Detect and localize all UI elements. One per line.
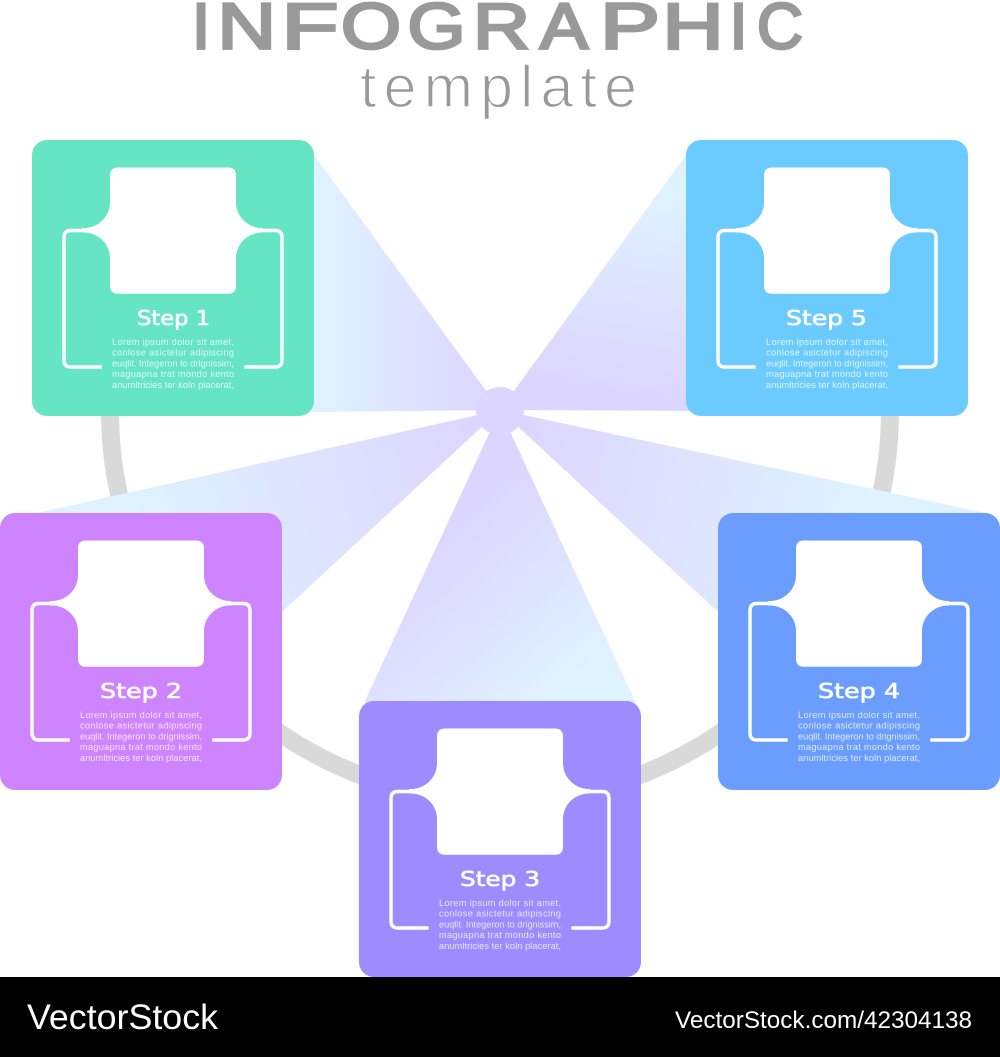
body text: conlose asictetur adipiscing <box>439 909 561 919</box>
panel: step 5 <box>686 140 968 416</box>
body text: maguapna trat mondo kento <box>80 742 202 752</box>
beam: step 1 <box>295 155 500 412</box>
body text: maguapna trat mondo kento <box>766 369 888 379</box>
body text <box>798 710 920 763</box>
body text: Lorem ipsum dolor sit amet, <box>798 710 920 720</box>
body text: Lorem ipsum dolor sit amet, <box>766 337 888 347</box>
card background <box>32 140 314 416</box>
beam: step 5 <box>500 155 705 411</box>
subtitle: template <box>360 54 637 120</box>
step heading: Step 4 <box>818 679 900 703</box>
body text: anumltricies ter koln placerat, <box>439 941 561 951</box>
step heading: Step 3 <box>460 867 540 891</box>
body text: conlose asictetur adipiscing <box>112 348 234 358</box>
card background <box>0 513 282 790</box>
body text: euqlit. Integeron to drignissim, <box>80 732 202 742</box>
image placeholder with frame <box>718 168 936 367</box>
body text: conlose asictetur adipiscing <box>80 721 202 731</box>
central hub <box>476 387 524 435</box>
connecting ring arc <box>110 411 890 801</box>
body text: euqlit. Integeron to drignissim, <box>798 732 920 742</box>
body text: euqlit. Integeron to drignissim, <box>112 358 234 368</box>
panel: step 2 <box>0 513 282 790</box>
card background <box>686 140 968 416</box>
body text: anumltricies ter koln placerat, <box>80 753 202 763</box>
body text: anumltricies ter koln placerat, <box>112 380 234 390</box>
step heading: Step 5 <box>786 306 867 330</box>
card background <box>718 513 1000 790</box>
card background <box>359 701 641 977</box>
title <box>192 0 803 63</box>
step heading: Step 2 <box>100 679 182 703</box>
body text: Lorem ipsum dolor sit amet, <box>439 898 561 908</box>
body text: euqlit. Integeron to drignissim, <box>766 358 888 368</box>
image placeholder with frame <box>64 168 282 367</box>
body text <box>439 898 561 951</box>
beam: step 2 <box>37 410 500 632</box>
panel: step 4 <box>718 513 1000 790</box>
body text: Lorem ipsum dolor sit amet, <box>112 337 234 347</box>
panel: step 1 <box>32 140 314 416</box>
body text <box>112 337 234 390</box>
body text: anumltricies ter koln placerat, <box>766 380 888 390</box>
footer logo: VectorStock <box>27 998 219 1037</box>
beams from hub to cards <box>37 155 986 720</box>
image placeholder with frame <box>32 540 250 740</box>
panel: step 3 <box>359 701 641 977</box>
body text <box>80 710 202 763</box>
body text: maguapna trat mondo kento <box>439 930 561 940</box>
body text: conlose asictetur adipiscing <box>766 348 888 358</box>
body text: maguapna trat mondo kento <box>112 369 234 379</box>
step heading: Step 1 <box>137 306 210 330</box>
beam: step 3 <box>365 410 635 720</box>
body text: conlose asictetur adipiscing <box>798 721 920 731</box>
image placeholder with frame <box>391 728 609 928</box>
body text: maguapna trat mondo kento <box>798 742 920 752</box>
footer url: VectorStock.com/42304138 <box>675 1007 972 1034</box>
footer bar <box>0 977 1000 1057</box>
body text <box>766 337 888 390</box>
beam: step 4 <box>500 410 986 632</box>
body text: anumltricies ter koln placerat, <box>798 753 920 763</box>
body text: euqlit. Integeron to drignissim, <box>439 920 561 930</box>
image placeholder with frame <box>750 540 968 740</box>
body text: Lorem ipsum dolor sit amet, <box>80 710 202 720</box>
